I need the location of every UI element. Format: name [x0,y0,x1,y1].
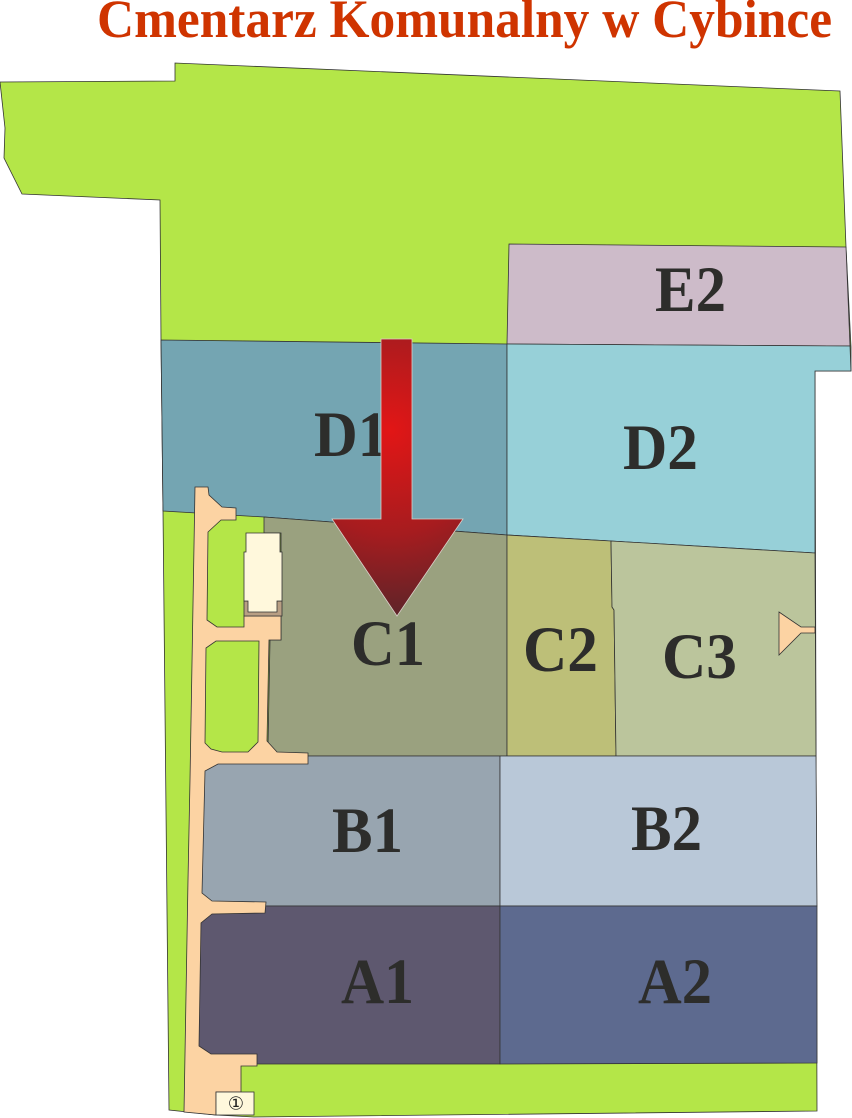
zone B2 [500,756,817,906]
entrance plate with marker: ① [228,1094,244,1114]
label C3: C3 [662,621,737,693]
building [244,533,282,612]
entrance plate with marker [216,1092,254,1115]
zone A2 [500,906,817,1064]
label D2: D2 [623,412,698,484]
zone C3 [611,541,816,756]
label A1: A1 [341,946,414,1018]
label C2: C2 [523,614,598,686]
arrow [332,339,463,616]
label D1: D1 [314,399,388,471]
zone B1 [200,756,500,906]
label B1: B1 [332,795,403,867]
footpaths [184,487,308,1115]
triangular path end [779,612,815,655]
green patch between paths [205,641,259,752]
label A2: A2 [638,946,712,1018]
zone A1 [198,906,500,1064]
label C1: C1 [351,608,425,680]
building base [244,601,282,616]
zone D1 [161,340,507,535]
zone C2 [507,535,616,756]
label B2: B2 [631,793,702,865]
label E2: E2 [655,254,726,326]
zone E2 [507,244,850,346]
zone C1 [264,517,507,756]
zone D2 [507,344,851,553]
